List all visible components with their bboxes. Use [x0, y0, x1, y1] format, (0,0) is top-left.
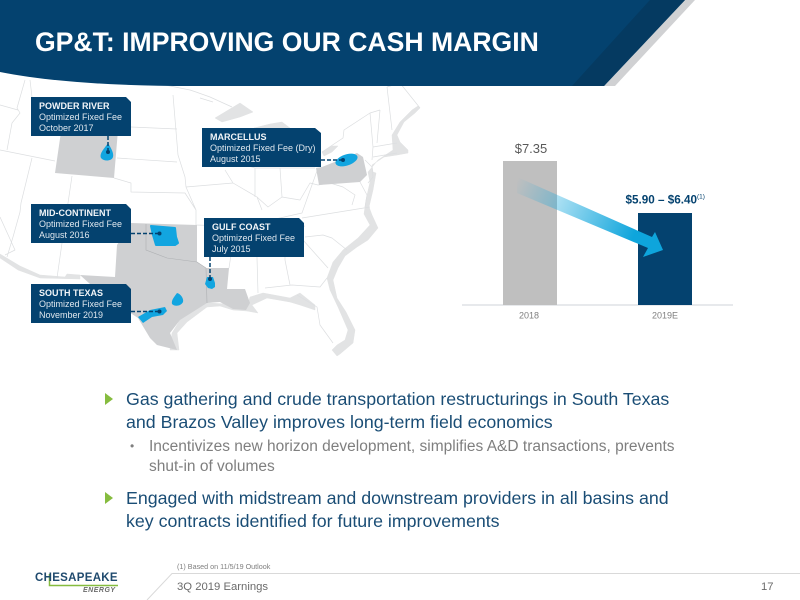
value label 2019E: (1) [697, 194, 705, 200]
footer rule [146, 573, 800, 600]
title banner [0, 0, 695, 86]
state borders [0, 80, 420, 343]
bullet: midstream providers [105, 488, 669, 531]
arrow: margin decline [517, 177, 663, 257]
callout: South Texas [31, 284, 131, 323]
sub-bullet: incentives: shut-in of volumes [149, 458, 275, 474]
callout: Marcellus: Optimized Fixed Fee (Dry) [210, 142, 316, 152]
callout: South Texas: Optimized Fixed Fee [39, 298, 122, 308]
bullet: gathering restructurings: and Brazos Valley improves long-term field economics [126, 412, 553, 432]
callout: Mid-Continent: Optimized Fixed Fee [39, 218, 122, 228]
callout: Gulf Coast: GULF COAST [212, 222, 270, 232]
logo: Chesapeake Energy [35, 572, 118, 594]
bullet: gathering restructurings [105, 389, 669, 432]
sub-bullet: incentives [130, 438, 675, 474]
callout: Powder River: October 2017 [39, 122, 94, 132]
sub-bullet: incentives: • [130, 439, 134, 453]
dashed leader lines [106, 136, 345, 314]
bar: 2019E [638, 213, 692, 305]
logo: Chesapeake Energy: CHESAPEAKE [35, 572, 118, 584]
footer label: 3Q 2019 Earnings [177, 581, 268, 593]
callout: Marcellus: August 2015 [210, 154, 261, 164]
title: GP&T: IMPROVING OUR CASH MARGIN [35, 27, 539, 57]
callout: Marcellus: MARCELLUS [210, 132, 266, 142]
axis label 2019E: 2019E [652, 310, 678, 320]
callout: South Texas: SOUTH TEXAS [39, 288, 103, 298]
basin shapes [101, 143, 359, 323]
sub-bullet: incentives: Incentivizes new horizon development, simplifies A&D transactions, prevents [149, 438, 675, 455]
callout: Powder River [31, 97, 131, 136]
callout: Gulf Coast: Optimized Fixed Fee [212, 232, 295, 242]
axis label 2018: 2018 [519, 310, 539, 320]
Great Lakes and coastline strips [0, 103, 420, 356]
callout: Mid-Continent: MID-CONTINENT [39, 208, 111, 218]
bar chart: cash margin [462, 141, 733, 320]
callout: Marcellus [202, 128, 321, 167]
callout: Powder River: POWDER RIVER [39, 100, 110, 110]
callout: Powder River: Optimized Fixed Fee [39, 112, 122, 122]
callout: Gulf Coast [204, 218, 304, 257]
footnote: (1) Based on 11/5/19 Outlook [177, 562, 270, 571]
callout: Mid-Continent [31, 204, 131, 243]
callout: Gulf Coast: July 2015 [212, 244, 251, 254]
callout: Mid-Continent: August 2016 [39, 230, 90, 240]
value label 2019E: $5.90 – $6.40 [626, 194, 697, 206]
logo: Chesapeake Energy: ENERGY [83, 587, 116, 594]
value label 2018: $7.35 [515, 141, 547, 156]
bullet: gathering restructurings: Gas gathering and crude transportation restructurings in South Texas [126, 389, 669, 409]
page number: 17 [761, 581, 774, 593]
bar: 2018 [503, 161, 557, 305]
callout: South Texas: November 2019 [39, 310, 103, 320]
bullet: midstream providers: Engaged with midstream and downstream providers in all basins and [126, 488, 669, 508]
shaded operating states [55, 125, 367, 350]
bullet: midstream providers: key contracts identified for future improvements [126, 511, 500, 531]
